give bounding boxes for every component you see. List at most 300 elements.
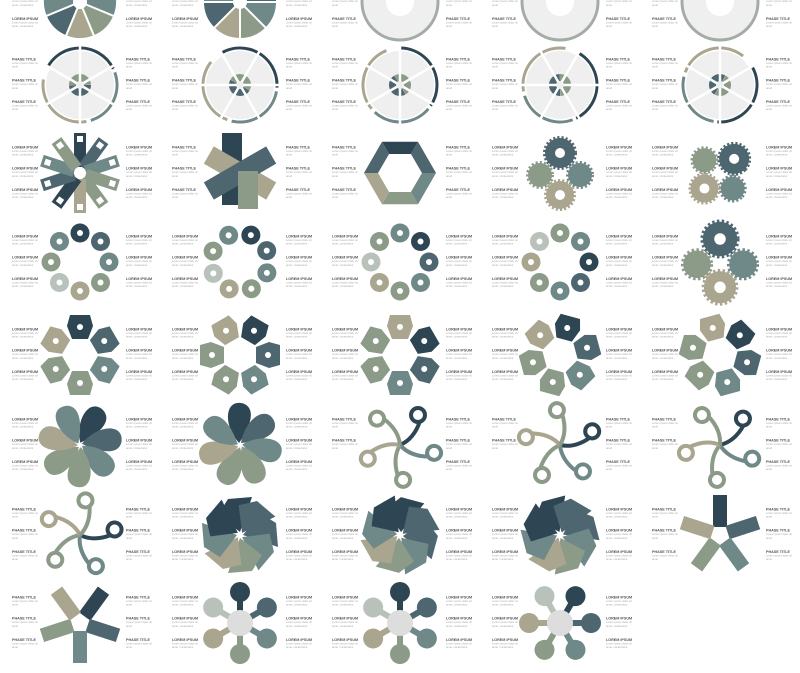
right text: Lorem ipsum dolor sit amet, consectetur: [606, 353, 632, 360]
row 8 col 4 panel: [480, 581, 640, 665]
left text: Lorem ipsum dolor sit amet, consectetur: [172, 260, 198, 267]
petal ring diagram: [518, 313, 602, 397]
left text: Lorem ipsum dolor sit amet, consectetur: [172, 554, 198, 561]
row 5 col 3 panel: [320, 313, 480, 397]
right text: Lorem ipsum dolor sit amet, consectetur: [606, 150, 632, 157]
right text: Lorem ipsum dolor sit amet, consectetur: [126, 150, 152, 157]
right text: Lorem ipsum dolor sit amet, consectetur: [286, 443, 312, 450]
row 3 col 2 panel: [160, 131, 320, 215]
right text: PHASE TITLE: [126, 78, 150, 83]
row 4 col 3 panel: [320, 220, 480, 304]
left text: Lorem ipsum dolor sit amet: [172, 62, 198, 69]
left text: Lorem ipsum dolor sit amet, consectetur: [172, 621, 198, 628]
right text: PHASE TITLE: [286, 99, 310, 104]
right text: Lorem ipsum dolor sit amet, consectetur: [126, 239, 152, 246]
ring diagram: [520, 0, 600, 42]
right text: LOREM IPSUM: [446, 276, 472, 281]
right text: [126, 57, 152, 111]
left text: Lorem ipsum dolor sit amet: [172, 83, 198, 90]
left text: Lorem ipsum dolor sit amet, consectetur: [332, 260, 358, 267]
left text: PHASE TITLE: [332, 166, 356, 171]
left text: LOREM IPSUM: [492, 637, 518, 642]
right text: Lorem ipsum dolor sit amet: [606, 104, 632, 111]
right text: Lorem ipsum dolor sit amet, consectetur: [606, 600, 632, 607]
left text: LOREM IPSUM: [492, 276, 518, 281]
left text: LOREM IPSUM: [492, 616, 518, 621]
right text: Lorem ipsum dolor sit amet: [286, 150, 312, 157]
right text: PHASE TITLE: [766, 438, 790, 443]
left text: Lorem ipsum dolor sit amet, consectetur: [332, 600, 358, 607]
left text: LOREM IPSUM: [332, 327, 358, 332]
right text: Lorem ipsum dolor sit amet: [126, 512, 152, 519]
right text: Lorem ipsum dolor sit amet: [766, 464, 792, 471]
badge ring diagram: [198, 220, 282, 304]
left text: Lorem ipsum dolor sit amet: [172, 104, 198, 111]
right text: LOREM IPSUM: [766, 234, 792, 238]
right text: Lorem ipsum dolor sit amet: [446, 0, 472, 7]
right text: [606, 145, 634, 200]
left text: Lorem ipsum dolor sit amet: [172, 150, 198, 157]
left text: [492, 234, 520, 289]
left text: LOREM IPSUM: [492, 234, 518, 238]
right text: LOREM IPSUM: [446, 616, 472, 621]
left text: PHASE TITLE: [492, 16, 516, 21]
right text: Lorem ipsum dolor sit amet: [766, 62, 792, 69]
row 2 col 1 panel: [12, 46, 152, 124]
right text: LOREM IPSUM: [606, 348, 632, 353]
left text: Lorem ipsum dolor sit amet, consectetur: [332, 374, 358, 381]
right text: LOREM IPSUM: [606, 595, 632, 600]
left text: Lorem ipsum dolor sit amet, consectetur: [12, 332, 38, 339]
right text: Lorem ipsum dolor sit amet: [286, 104, 312, 111]
right text: Lorem ipsum dolor sit amet, consectetur: [766, 353, 792, 360]
curl diagram: [518, 403, 602, 487]
right text: LOREM IPSUM: [766, 255, 792, 260]
left text: Lorem ipsum dolor sit amet, consectetur: [652, 332, 678, 339]
left text: LOREM IPSUM: [12, 348, 38, 353]
left text: Lorem ipsum dolor sit amet, consectetur: [652, 150, 678, 157]
right text: [286, 417, 314, 472]
left text: Lorem ipsum dolor sit amet: [12, 600, 38, 607]
left text: [172, 595, 200, 650]
left text: LOREM IPSUM: [332, 528, 358, 533]
right text: PHASE TITLE: [286, 187, 310, 192]
right text: LOREM IPSUM: [606, 616, 632, 621]
right text: Lorem ipsum dolor sit amet, consectetur: [446, 353, 472, 360]
left text: Lorem ipsum dolor sit amet: [332, 104, 358, 111]
row 2 col 2 panel: [172, 46, 312, 124]
right text: Lorem ipsum dolor sit amet, consectetur: [126, 171, 152, 178]
left text: Lorem ipsum dolor sit amet, consectetur: [492, 642, 518, 649]
left text: Lorem ipsum dolor sit amet: [652, 104, 678, 111]
left text: PHASE TITLE: [332, 187, 356, 192]
left text: PHASE TITLE: [652, 438, 676, 443]
right text: [766, 507, 794, 562]
right text: LOREM IPSUM: [446, 528, 472, 533]
right text: Lorem ipsum dolor sit amet, consectetur: [606, 374, 632, 381]
left text: Lorem ipsum dolor sit amet, consectetur: [652, 260, 678, 267]
right text: Lorem ipsum dolor sit amet: [126, 62, 152, 69]
right text: Lorem ipsum dolor sit amet: [606, 0, 632, 7]
right text: [446, 417, 474, 472]
left text: Lorem ipsum dolor sit amet: [332, 150, 358, 157]
left text: [652, 57, 678, 111]
left text: Lorem ipsum dolor sit amet, consectetur: [332, 533, 358, 540]
right text: [286, 0, 312, 28]
right text: LOREM IPSUM: [286, 417, 312, 422]
right text: Lorem ipsum dolor sit amet, consectetur: [606, 239, 632, 246]
left text: LOREM IPSUM: [492, 348, 518, 353]
left text: Lorem ipsum dolor sit amet: [12, 104, 38, 111]
left text: [12, 0, 38, 28]
left text: [12, 595, 40, 650]
right text: LOREM IPSUM: [126, 369, 152, 374]
left text: Lorem ipsum dolor sit amet, consectetur: [12, 353, 38, 360]
left text: LOREM IPSUM: [12, 234, 38, 238]
right text: Lorem ipsum dolor sit amet: [446, 83, 472, 90]
right text: Lorem ipsum dolor sit amet: [286, 83, 312, 90]
left text: Lorem ipsum dolor sit amet, consectetur: [492, 150, 518, 157]
left text: Lorem ipsum dolor sit amet, consectetur: [492, 239, 518, 246]
left text: PHASE TITLE: [652, 99, 676, 104]
left text: PHASE TITLE: [332, 57, 356, 62]
left text: LOREM IPSUM: [332, 507, 358, 512]
left text: [332, 595, 360, 650]
left text: Lorem ipsum dolor sit amet: [492, 422, 518, 429]
left text: LOREM IPSUM: [12, 145, 38, 150]
row 6 col 4 panel: [480, 403, 640, 487]
right text: Lorem ipsum dolor sit amet: [126, 600, 152, 607]
left text: Lorem ipsum dolor sit amet, consectetur: [172, 600, 198, 607]
left text: [652, 417, 680, 450]
left text: Lorem ipsum dolor sit amet, consectetur: [332, 353, 358, 360]
left text: [652, 234, 680, 289]
row 1 col 3 panel: [332, 0, 472, 42]
right text: Lorem ipsum dolor sit amet, consectetur: [126, 21, 152, 28]
left text: Lorem ipsum dolor sit amet, consectetur: [332, 554, 358, 561]
right text: [126, 145, 154, 200]
left text: Lorem ipsum dolor sit amet: [492, 0, 518, 7]
right text: LOREM IPSUM: [446, 348, 472, 353]
left text: Lorem ipsum dolor sit amet: [332, 21, 358, 28]
right text: [606, 0, 632, 28]
row 5 col 4 panel: [480, 313, 640, 397]
right text: Lorem ipsum dolor sit amet, consectetur: [446, 642, 472, 649]
right text: Lorem ipsum dolor sit amet, consectetur: [446, 554, 472, 561]
left text: LOREM IPSUM: [332, 616, 358, 621]
left text: Lorem ipsum dolor sit amet, consectetur: [12, 374, 38, 381]
right text: PHASE TITLE: [126, 507, 150, 512]
right text: Lorem ipsum dolor sit amet: [286, 192, 312, 199]
right text: [286, 595, 314, 650]
left text: Lorem ipsum dolor sit amet: [12, 621, 38, 628]
left text: Lorem ipsum dolor sit amet, consectetur: [12, 239, 38, 246]
right text: LOREM IPSUM: [766, 348, 792, 353]
left text: Lorem ipsum dolor sit amet, consectetur: [332, 642, 358, 649]
left text: PHASE TITLE: [172, 99, 196, 104]
left text: Lorem ipsum dolor sit amet: [652, 83, 678, 90]
left text: PHASE TITLE: [332, 417, 356, 422]
row 4 col 4 panel: [480, 220, 640, 304]
left text: Lorem ipsum dolor sit amet: [652, 62, 678, 69]
right text: PHASE TITLE: [606, 57, 630, 62]
left text: Lorem ipsum dolor sit amet: [12, 83, 38, 90]
right text: Lorem ipsum dolor sit amet, consectetur: [766, 192, 792, 199]
left text: PHASE TITLE: [652, 78, 676, 83]
left text: PHASE TITLE: [332, 99, 356, 104]
right text: [766, 327, 794, 382]
left text: Lorem ipsum dolor sit amet, consectetur: [492, 332, 518, 339]
right text: LOREM IPSUM: [766, 166, 792, 171]
hub diagram: [358, 581, 442, 665]
right text: PHASE TITLE: [446, 166, 470, 171]
swirl diagram: [38, 403, 122, 487]
right text: Lorem ipsum dolor sit amet, consectetur: [126, 260, 152, 267]
left text: LOREM IPSUM: [492, 255, 518, 260]
row 7 col 1 panel: [0, 493, 160, 577]
left text: PHASE TITLE: [12, 507, 36, 512]
left text: PHASE TITLE: [12, 78, 36, 83]
right text: LOREM IPSUM: [286, 327, 312, 332]
left text: PHASE TITLE: [332, 78, 356, 83]
left text: Lorem ipsum dolor sit amet: [332, 171, 358, 178]
right text: [766, 234, 794, 289]
row 5 col 2 panel: [160, 313, 320, 397]
left text: Lorem ipsum dolor sit amet, consectetur: [332, 512, 358, 519]
left text: [492, 0, 518, 28]
right text: LOREM IPSUM: [446, 507, 472, 512]
right text: Lorem ipsum dolor sit amet, consectetur: [286, 281, 312, 288]
left text: Lorem ipsum dolor sit amet: [652, 21, 678, 28]
right text: Lorem ipsum dolor sit amet: [126, 533, 152, 540]
left text: LOREM IPSUM: [172, 369, 198, 374]
blob diagram: [678, 131, 762, 215]
right text: LOREM IPSUM: [126, 276, 152, 281]
left text: Lorem ipsum dolor sit amet: [172, 171, 198, 178]
right text: Lorem ipsum dolor sit amet, consectetur: [286, 642, 312, 649]
left text: Lorem ipsum dolor sit amet, consectetur: [172, 642, 198, 649]
left text: PHASE TITLE: [12, 549, 36, 554]
left text: Lorem ipsum dolor sit amet: [492, 62, 518, 69]
left text: Lorem ipsum dolor sit amet, consectetur: [12, 21, 38, 28]
left text: LOREM IPSUM: [172, 637, 198, 642]
curl diagram: [358, 403, 442, 487]
row 6 col 1 panel: [0, 403, 160, 487]
right text: PHASE TITLE: [126, 616, 150, 621]
right text: Lorem ipsum dolor sit amet: [446, 150, 472, 157]
left text: Lorem ipsum dolor sit amet: [332, 192, 358, 199]
right text: LOREM IPSUM: [286, 528, 312, 533]
left text: Lorem ipsum dolor sit amet: [12, 62, 38, 69]
left text: Lorem ipsum dolor sit amet, consectetur: [332, 621, 358, 628]
left text: LOREM IPSUM: [652, 369, 678, 374]
right text: Lorem ipsum dolor sit amet, consectetur: [286, 332, 312, 339]
left text: LOREM IPSUM: [652, 327, 678, 332]
row 2 col 4 panel: [492, 46, 632, 124]
right text: PHASE TITLE: [126, 549, 150, 554]
right text: Lorem ipsum dolor sit amet: [766, 512, 792, 519]
left text: LOREM IPSUM: [652, 166, 678, 171]
right text: [766, 417, 794, 472]
left text: PHASE TITLE: [652, 507, 676, 512]
left text: Lorem ipsum dolor sit amet: [332, 0, 358, 7]
right text: LOREM IPSUM: [446, 595, 472, 600]
right text: Lorem ipsum dolor sit amet: [446, 62, 472, 69]
left text: [12, 507, 40, 562]
curl diagram: [678, 403, 762, 487]
right text: [126, 507, 154, 562]
left text: [172, 234, 200, 289]
row 6 col 3 panel: [320, 403, 480, 487]
left text: LOREM IPSUM: [492, 369, 518, 374]
right text: Lorem ipsum dolor sit amet, consectetur: [766, 150, 792, 157]
right text: Lorem ipsum dolor sit amet, consectetur: [126, 332, 152, 339]
left text: PHASE TITLE: [172, 187, 196, 192]
left text: LOREM IPSUM: [652, 348, 678, 353]
right text: [606, 57, 632, 111]
left text: PHASE TITLE: [172, 57, 196, 62]
left text: LOREM IPSUM: [492, 145, 518, 150]
right text: LOREM IPSUM: [286, 438, 312, 443]
right text: [606, 234, 634, 289]
left text: PHASE TITLE: [492, 78, 516, 83]
left text: LOREM IPSUM: [172, 16, 198, 21]
right text: [766, 57, 792, 111]
right text: [446, 234, 474, 289]
right text: Lorem ipsum dolor sit amet, consectetur: [766, 374, 792, 381]
left text: LOREM IPSUM: [172, 348, 198, 353]
left text: Lorem ipsum dolor sit amet: [652, 422, 678, 429]
right text: Lorem ipsum dolor sit amet, consectetur: [446, 512, 472, 519]
right text: LOREM IPSUM: [766, 369, 792, 374]
right text: Lorem ipsum dolor sit amet: [446, 443, 472, 450]
left text: LOREM IPSUM: [652, 187, 678, 192]
right text: LOREM IPSUM: [286, 276, 312, 281]
left text: PHASE TITLE: [652, 549, 676, 554]
right text: Lorem ipsum dolor sit amet: [446, 21, 472, 28]
right text: LOREM IPSUM: [446, 234, 472, 238]
left text: LOREM IPSUM: [332, 637, 358, 642]
left text: Lorem ipsum dolor sit amet, consectetur: [12, 0, 38, 7]
left text: Lorem ipsum dolor sit amet, consectetur: [12, 192, 38, 199]
right text: Lorem ipsum dolor sit amet: [766, 0, 792, 7]
left text: LOREM IPSUM: [172, 438, 198, 443]
left text: Lorem ipsum dolor sit amet, consectetur: [12, 281, 38, 288]
row 4 col 5 panel: [640, 220, 800, 304]
row 7 col 5 panel: [640, 493, 800, 577]
right text: PHASE TITLE: [606, 459, 630, 464]
right text: Lorem ipsum dolor sit amet, consectetur: [606, 512, 632, 519]
left text: LOREM IPSUM: [652, 234, 678, 238]
right text: Lorem ipsum dolor sit amet, consectetur: [446, 260, 472, 267]
right text: Lorem ipsum dolor sit amet, consectetur: [126, 422, 152, 429]
left text: Lorem ipsum dolor sit amet: [492, 21, 518, 28]
right text: PHASE TITLE: [766, 507, 790, 512]
left text: [172, 57, 198, 111]
right text: Lorem ipsum dolor sit amet: [766, 422, 792, 429]
right text: LOREM IPSUM: [126, 255, 152, 260]
left text: Lorem ipsum dolor sit amet, consectetur: [172, 374, 198, 381]
left text: PHASE TITLE: [332, 145, 356, 150]
left text: Lorem ipsum dolor sit amet: [652, 512, 678, 519]
star rectangles diagram: [678, 493, 762, 577]
right text: LOREM IPSUM: [126, 348, 152, 353]
left text: [332, 57, 358, 111]
right text: Lorem ipsum dolor sit amet: [446, 422, 472, 429]
row 3 col 1 panel: [0, 131, 160, 215]
right text: LOREM IPSUM: [446, 637, 472, 642]
left text: LOREM IPSUM: [652, 276, 678, 281]
left text: [332, 327, 360, 382]
right text: LOREM IPSUM: [286, 595, 312, 600]
polygon swirl diagram: [518, 493, 602, 577]
right text: LOREM IPSUM: [286, 616, 312, 621]
blob diagram: [518, 131, 602, 215]
left text: PHASE TITLE: [12, 99, 36, 104]
left text: Lorem ipsum dolor sit amet: [332, 83, 358, 90]
right text: Lorem ipsum dolor sit amet: [286, 171, 312, 178]
right text: Lorem ipsum dolor sit amet, consectetur: [286, 512, 312, 519]
right text: Lorem ipsum dolor sit amet: [126, 104, 152, 111]
row 8 col 2 panel: [160, 581, 320, 665]
right text: Lorem ipsum dolor sit amet, consectetur: [446, 332, 472, 339]
left text: [172, 327, 200, 382]
right text: Lorem ipsum dolor sit amet, consectetur: [606, 642, 632, 649]
badge ring diagram: [358, 220, 442, 304]
right text: Lorem ipsum dolor sit amet: [606, 443, 632, 450]
right text: [286, 234, 314, 289]
left text: Lorem ipsum dolor sit amet, consectetur: [492, 353, 518, 360]
left text: Lorem ipsum dolor sit amet: [12, 642, 38, 649]
left text: Lorem ipsum dolor sit amet, consectetur: [172, 422, 198, 429]
left text: [332, 507, 360, 562]
right text: PHASE TITLE: [606, 78, 630, 83]
left text: LOREM IPSUM: [172, 549, 198, 554]
left text: LOREM IPSUM: [12, 16, 38, 21]
left text: Lorem ipsum dolor sit amet, consectetur: [172, 332, 198, 339]
row 5 col 1 panel: [0, 313, 160, 397]
right text: Lorem ipsum dolor sit amet, consectetur: [126, 0, 152, 7]
left text: LOREM IPSUM: [652, 145, 678, 150]
left text: Lorem ipsum dolor sit amet, consectetur: [172, 512, 198, 519]
row 1 col 2 panel: [172, 0, 312, 38]
right text: Lorem ipsum dolor sit amet, consectetur: [606, 621, 632, 628]
row 1 col 5 panel: [652, 0, 792, 42]
right text: Lorem ipsum dolor sit amet: [126, 554, 152, 561]
right text: Lorem ipsum dolor sit amet, consectetur: [606, 281, 632, 288]
right text: LOREM IPSUM: [126, 16, 152, 21]
right text: [446, 0, 472, 28]
right text: LOREM IPSUM: [286, 234, 312, 238]
right text: Lorem ipsum dolor sit amet, consectetur: [286, 464, 312, 471]
row 2 col 5 panel: [652, 46, 792, 124]
right text: Lorem ipsum dolor sit amet, consectetur: [286, 0, 312, 7]
right text: LOREM IPSUM: [286, 507, 312, 512]
left text: [652, 145, 680, 200]
right text: Lorem ipsum dolor sit amet: [606, 83, 632, 90]
radial bars diagram: [38, 131, 122, 215]
right text: Lorem ipsum dolor sit amet, consectetur: [286, 600, 312, 607]
left text: Lorem ipsum dolor sit amet, consectetur: [172, 443, 198, 450]
right text: [446, 327, 474, 382]
left text: LOREM IPSUM: [172, 459, 198, 464]
left text: LOREM IPSUM: [172, 595, 198, 600]
right text: Lorem ipsum dolor sit amet: [606, 21, 632, 28]
left text: PHASE TITLE: [12, 637, 36, 642]
row 3 col 5 panel: [640, 131, 800, 215]
left text: Lorem ipsum dolor sit amet, consectetur: [172, 464, 198, 471]
left text: Lorem ipsum dolor sit amet, consectetur: [172, 0, 198, 7]
